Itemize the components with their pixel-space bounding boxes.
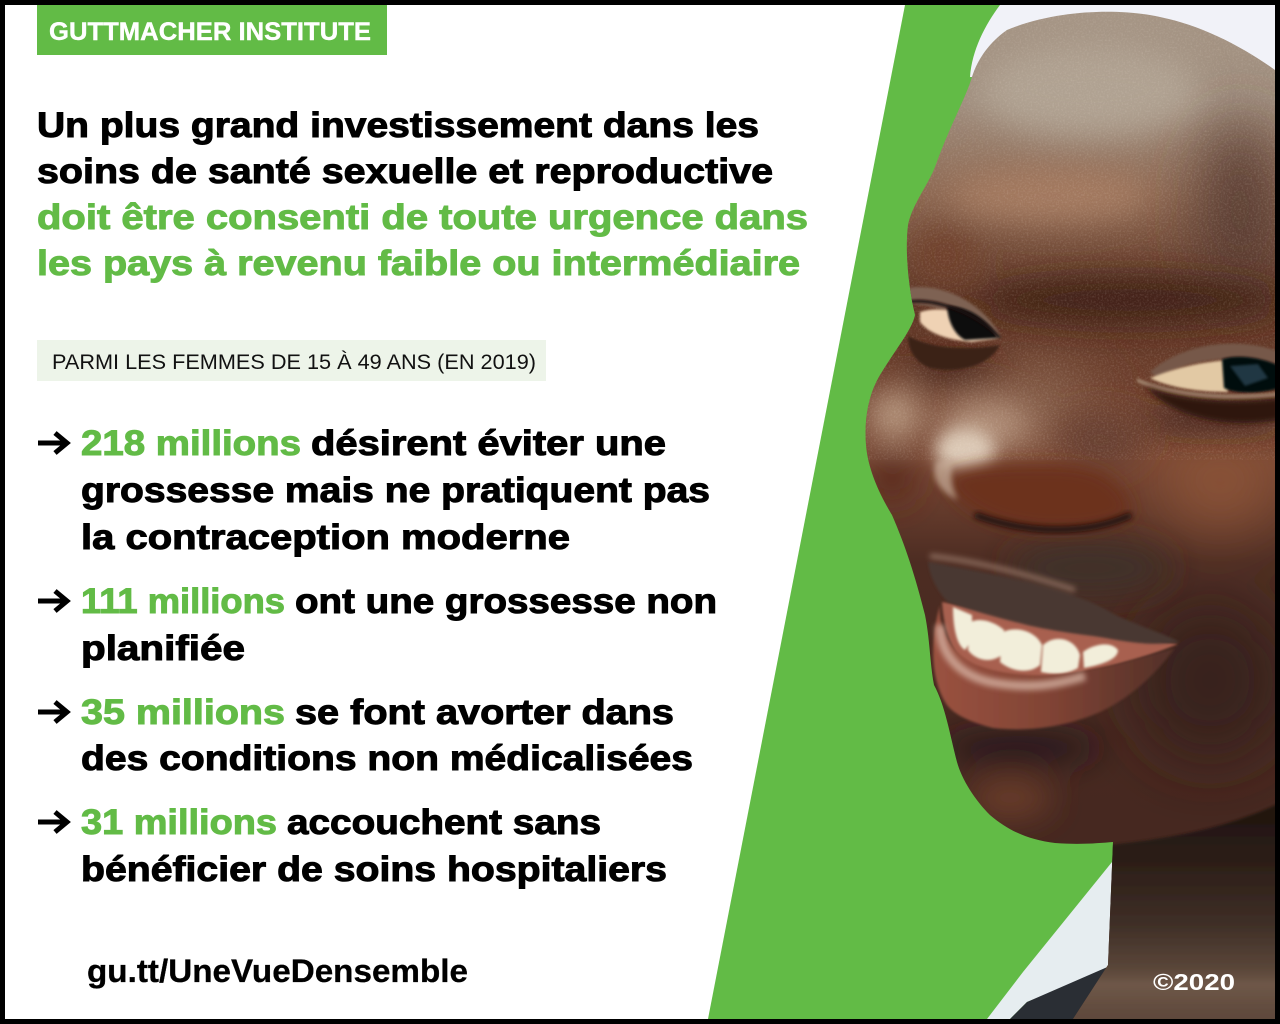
stat: 111 millions: 111 millions — [81, 582, 285, 621]
gums — [942, 602, 1178, 680]
stat: 31 millions: 31 millions — [81, 803, 277, 842]
stat: 218 millions: grossesse mais ne pratiquent pas — [81, 471, 710, 510]
stat: 218 millions: la contraception moderne — [81, 518, 570, 557]
mouth — [928, 556, 1180, 729]
arrow — [38, 433, 67, 453]
lip highlight — [940, 625, 1085, 686]
copyright: ©2020 — [1153, 969, 1235, 995]
heading: les pays à revenu faible ou intermédiaire — [37, 244, 800, 283]
arrow — [38, 812, 67, 832]
lower lip — [933, 605, 1175, 729]
headwrap — [970, 5, 1275, 77]
source URL: gu.tt/UneVueDensemble — [87, 953, 468, 989]
teeth — [953, 607, 1118, 674]
stat: 218 millions: désirent éviter une — [311, 424, 666, 463]
stat: 111 millions: planifiée — [81, 629, 245, 668]
stat: 35 millions: 35 millions — [81, 693, 285, 732]
nose underside — [945, 464, 1133, 530]
face and neck — [860, 0, 1280, 1024]
upper lip — [928, 562, 1180, 644]
stat: 111 millions — [38, 582, 717, 668]
stat: 111 millions: ont une grossesse non — [295, 582, 717, 621]
nose bridge highlight — [935, 428, 995, 472]
stat: 31 millions — [38, 803, 667, 889]
arrow — [38, 702, 67, 722]
stat: 31 millions: bénéficier de soins hospitaliers — [81, 850, 667, 889]
skin grain — [860, 0, 1280, 460]
photo: smiling woman — [860, 0, 1280, 1024]
green diagonal panel — [708, 5, 1275, 1019]
heading: Un plus grand investissement dans les — [37, 106, 759, 145]
right eye — [1137, 344, 1280, 423]
arrow — [38, 591, 67, 611]
stat: 35 millions: des conditions non médicalisées — [81, 739, 693, 778]
stat: 218 millions: 218 millions — [81, 424, 301, 463]
heading: soins de santé sexuelle et reproductive — [37, 152, 773, 191]
collar — [987, 862, 1112, 1019]
subtitle label: PARMI LES FEMMES DE 15 À 49 ANS (EN 2019) — [52, 349, 536, 374]
stat: 35 millions — [38, 693, 693, 778]
stat: 31 millions: accouchent sans — [287, 803, 601, 842]
neck — [1073, 804, 1275, 1019]
source tag — [37, 5, 387, 55]
stat: 218 millions — [38, 424, 710, 557]
subtitle label — [37, 340, 546, 381]
left eye — [908, 287, 1002, 370]
stat: 35 millions: se font avorter dans — [295, 693, 674, 732]
source tag: GUTTMACHER INSTITUTE — [49, 18, 371, 46]
heading — [37, 106, 808, 283]
heading: doit être consenti de toute urgence dans — [37, 198, 808, 237]
